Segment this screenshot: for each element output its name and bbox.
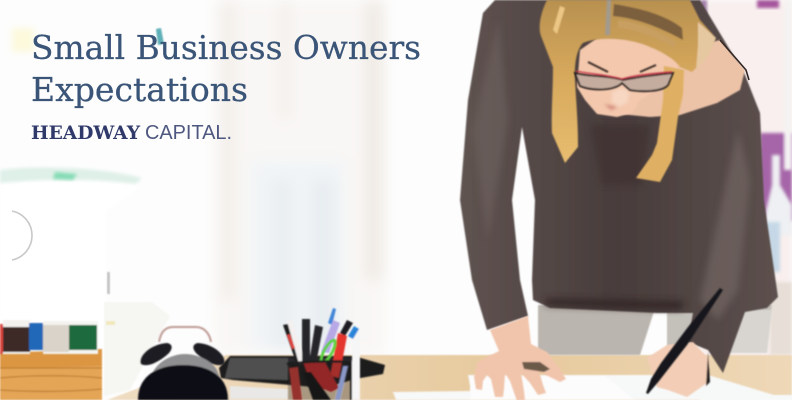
paper on table [393,375,792,400]
logo: Headway Capital: HEADWAY [31,122,140,144]
trousers [538,305,772,357]
wooden thread box [0,349,102,400]
shoulder skin [610,40,745,117]
nose and mouth [604,88,629,110]
logo: Headway Capital: CAPITAL. [145,121,232,144]
title: Small Business Owners [31,29,421,67]
title: Expectations [31,71,248,109]
hair right lock [636,66,684,182]
thread spools [0,320,98,354]
right hand [647,342,710,397]
glasses [575,62,673,91]
neckline edge [720,40,749,80]
sweater shading [472,20,750,320]
title [31,29,421,109]
woman [460,0,778,400]
logo: Headway Capital [31,121,232,144]
pencil holder [283,308,360,400]
left hand [474,316,566,400]
tablet [219,356,385,388]
paper under clock [230,386,288,399]
sewing machine [0,167,170,396]
table top [107,355,792,400]
alarm clock [138,327,229,400]
sweater [460,0,778,373]
face [577,36,680,117]
pen [646,288,723,394]
hair top [540,0,716,163]
